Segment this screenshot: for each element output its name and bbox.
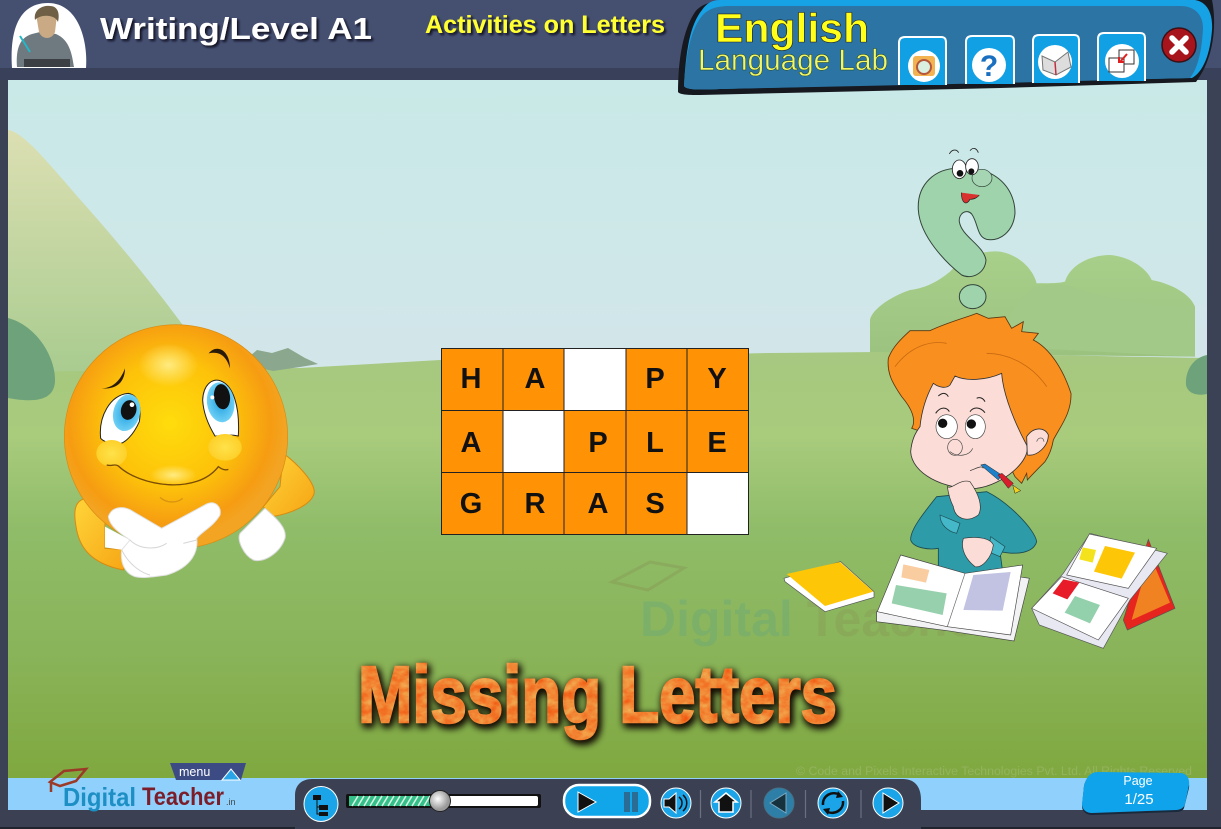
grid letters: P <box>645 363 665 395</box>
button: play and pause <box>564 785 650 817</box>
book stack right <box>1123 539 1175 630</box>
yellow book <box>784 562 874 612</box>
tab icon: help <box>966 36 1014 84</box>
menu tab <box>170 763 246 780</box>
button: previous <box>764 788 794 818</box>
boy body <box>911 492 1037 577</box>
grid letters: L <box>646 427 664 459</box>
eyebrows <box>102 368 125 388</box>
tab icon: resize <box>1098 33 1145 81</box>
missing letter cells <box>503 349 748 534</box>
logo: Digital Teacher: Digital <box>63 782 136 812</box>
button: volume <box>661 788 691 818</box>
boy hands <box>947 481 980 519</box>
copyright note: © Code and Pixels Interactive Technologies Pvt. Ltd. All Rights Reserved <box>796 766 1192 778</box>
grid letters: P <box>588 427 608 459</box>
page counter <box>1082 772 1189 815</box>
panel: English Language Lab header <box>678 0 1214 95</box>
tab icon: clock folder <box>899 37 946 85</box>
button: home <box>711 788 741 818</box>
control bar <box>295 779 921 829</box>
eyes <box>100 393 140 444</box>
open book centre <box>877 577 1029 641</box>
grid letters: A <box>588 488 609 520</box>
grid letters: S <box>645 488 665 520</box>
menu tab: menu <box>179 765 210 779</box>
grid letters: H <box>461 363 481 395</box>
boy eyes and nose <box>936 415 957 439</box>
tab icon: help: ? <box>980 50 998 83</box>
footer bar <box>0 778 1221 829</box>
grid letters <box>460 363 727 520</box>
tab icon: book <box>1033 35 1079 83</box>
logo: Digital Teacher: .in <box>226 797 236 807</box>
heading: Language Lab: Language Lab <box>698 44 888 77</box>
title: Missing Letters: Missing Letters <box>358 650 837 739</box>
grid letters: R <box>525 488 546 520</box>
watermark <box>612 562 995 647</box>
icon: thinking emoji <box>64 325 314 577</box>
boy hair <box>888 313 1071 483</box>
icon: thinking boy with books <box>784 313 1175 648</box>
heading: Writing/Level A1: Writing/Level A1 <box>100 11 372 46</box>
button: refresh <box>818 788 848 818</box>
boy face <box>911 373 1027 488</box>
heading: English: English <box>715 5 869 51</box>
grid letters: E <box>707 427 727 459</box>
cheeks and mouth <box>96 440 127 467</box>
button: next <box>873 788 903 818</box>
white gloved hand <box>108 503 220 577</box>
grid letters: A <box>525 363 546 395</box>
button: tree menu <box>304 786 338 822</box>
watermark: Digital Teacher <box>640 591 995 647</box>
grid letters: A <box>461 427 482 459</box>
icon: question mark character <box>918 148 1015 309</box>
header: learner avatar <box>12 3 86 68</box>
page counter: 1/25 <box>1124 791 1154 808</box>
icon: close button <box>1162 28 1196 62</box>
pen <box>981 464 1002 480</box>
heading: Activities on Letters: Activities on Letters <box>425 11 665 39</box>
grid letters: G <box>460 488 482 520</box>
logo: Digital Teacher <box>50 769 236 812</box>
logo: Digital Teacher: Teacher <box>142 783 224 811</box>
panel: letter grid <box>441 348 748 535</box>
grid letters: Y <box>707 363 727 395</box>
page counter: Page <box>1123 774 1153 788</box>
progress slider <box>346 790 541 812</box>
